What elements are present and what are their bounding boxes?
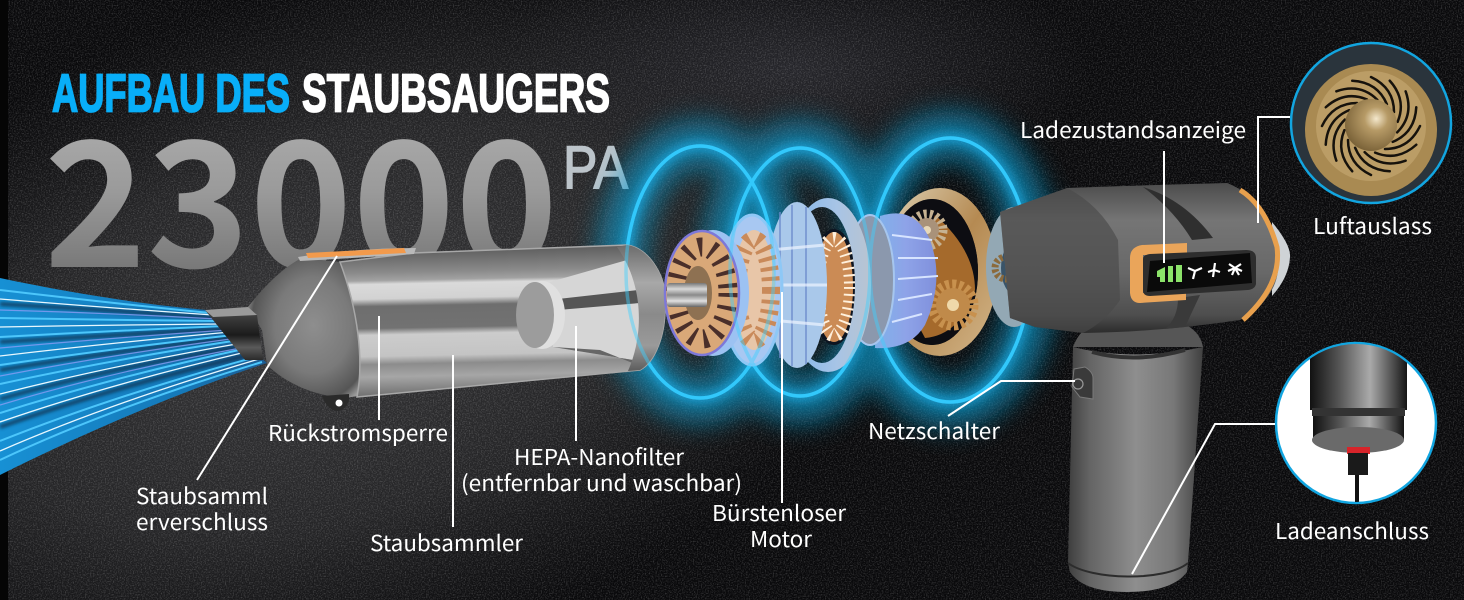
detail: charging port — [1276, 340, 1436, 505]
dust cover latch — [298, 248, 416, 261]
label: Ladeanschluss: Ladeanschluss — [1275, 514, 1429, 546]
title: STAUBSAUGERS — [302, 64, 610, 124]
icon: fan speed symbols — [1188, 263, 1242, 279]
collector dome — [248, 258, 361, 398]
ring highlights over motor — [626, 138, 1030, 402]
stator winding — [722, 215, 782, 365]
label: Staubsammlerverschluss — [136, 479, 268, 537]
body barrel — [1000, 183, 1278, 333]
lower hook — [322, 394, 349, 411]
label: Staubsammlerverschluss: Staubsamml — [136, 479, 268, 511]
big number 23000 PA: PA — [563, 134, 628, 201]
label: Staubsammlerverschluss: erverschluss — [136, 505, 268, 537]
vacuum dust collector — [205, 245, 665, 411]
handle — [1068, 347, 1203, 592]
icon: nozzle — [205, 307, 263, 360]
orange trim — [1240, 190, 1278, 320]
label: Ladezustandsanzeige: Ladezustandsanzeige — [1020, 113, 1246, 145]
big number 23000 PA: 23000 — [44, 66, 558, 318]
label: Bürstenloser Motor: Bürstenloser — [712, 496, 846, 528]
main vacuum body — [1000, 183, 1290, 592]
detail: air outlet — [1291, 43, 1451, 203]
label: Netzschalter: Netzschalter — [868, 414, 1000, 446]
blue stator ring — [767, 202, 827, 368]
front metal disc — [986, 207, 1042, 327]
copper fins — [810, 229, 858, 345]
HEPA filter — [516, 260, 640, 366]
label: Rückstromsperre: Rückstromsperre — [268, 416, 448, 448]
rotor disc — [665, 230, 749, 356]
icon: battery level — [1157, 265, 1182, 282]
silver ring — [785, 198, 871, 372]
icon: power button — [1072, 367, 1093, 399]
label: Staubsammler: Staubsammler — [370, 526, 523, 558]
air stream — [0, 278, 267, 475]
leader lines — [197, 117, 1290, 574]
swirl vents — [1317, 72, 1425, 180]
blue coil cylinder — [875, 213, 938, 348]
display panel — [1130, 243, 1256, 303]
exploded motor — [665, 188, 1042, 372]
title — [52, 64, 610, 124]
title: AUFBAU DES — [52, 64, 290, 124]
handle neck — [1073, 322, 1203, 347]
lower gear — [932, 284, 974, 326]
cylinder end rim — [617, 245, 665, 371]
label: Bürstenloser Motor — [712, 496, 846, 554]
label: HEPA-Nanofilter: (entfernbar und waschbar) — [461, 466, 742, 498]
label: Bürstenloser Motor: Motor — [750, 522, 812, 554]
label: HEPA-Nanofilter — [461, 440, 742, 498]
blue airflow rings — [620, 135, 1034, 405]
silver front cap — [1272, 222, 1290, 296]
upper gear — [911, 214, 943, 246]
label: Luftauslass: Luftauslass — [1313, 209, 1432, 241]
label: HEPA-Nanofilter: HEPA-Nanofilter — [514, 440, 684, 472]
mesh disc — [846, 215, 894, 345]
gold gear housing — [883, 188, 997, 356]
clear collector cylinder — [340, 245, 665, 397]
